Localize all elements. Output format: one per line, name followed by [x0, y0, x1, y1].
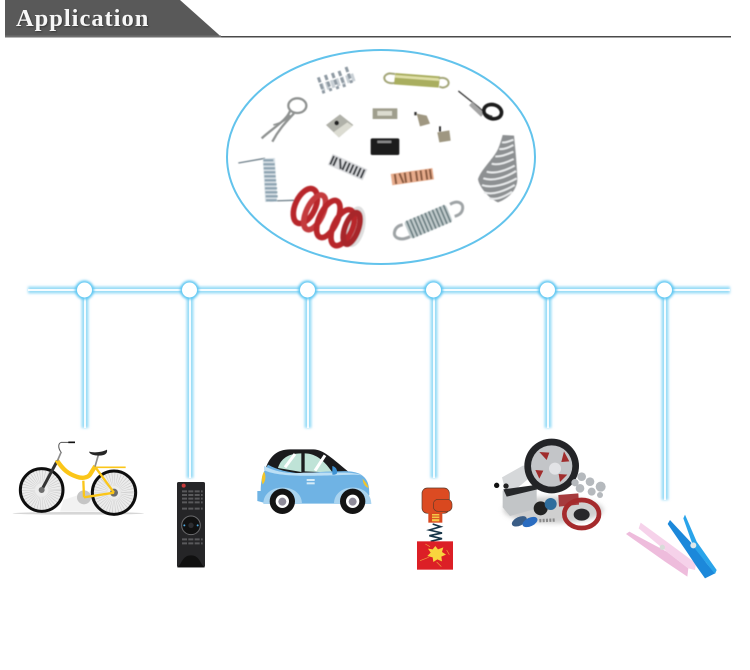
connector: auto parts: [544, 290, 552, 428]
timeline nodes: [75, 280, 674, 300]
icon: green extension spring: [384, 73, 449, 88]
icon: copper contact strip: [391, 168, 434, 185]
icon: bicycle: [13, 442, 144, 515]
icon: car: [257, 449, 371, 514]
icon: silver contact strip: [328, 154, 367, 180]
connector: bicycle: [82, 290, 88, 428]
panel: spring product ellipse: [227, 50, 535, 264]
icon: spring toy boxing glove: [417, 488, 453, 570]
icon: auto parts: [494, 439, 606, 529]
heading: Application: [16, 5, 149, 32]
icon: conical spring: [478, 135, 517, 202]
icon: metal clips: [326, 108, 451, 142]
connector: clothes pegs: [662, 290, 668, 500]
icon: black component: [371, 138, 399, 155]
icon: silver extension spring: [394, 202, 463, 239]
connector: remote control: [186, 290, 194, 478]
connector: spring toy: [430, 290, 438, 478]
icon: coil spring with tails: [238, 158, 294, 202]
icon: compression spring: [318, 67, 354, 93]
icon: clothes pegs: [626, 515, 717, 578]
timeline: horizontal glowing line: [28, 286, 730, 294]
icon: red coil spring: [288, 185, 369, 249]
section header: [5, 0, 731, 38]
icon: torsion clip: [458, 91, 503, 121]
heading: Application: [17, 6, 150, 33]
icon: remote control: [177, 482, 205, 567]
icon: R clip: [262, 98, 306, 142]
connector: car: [304, 290, 312, 428]
